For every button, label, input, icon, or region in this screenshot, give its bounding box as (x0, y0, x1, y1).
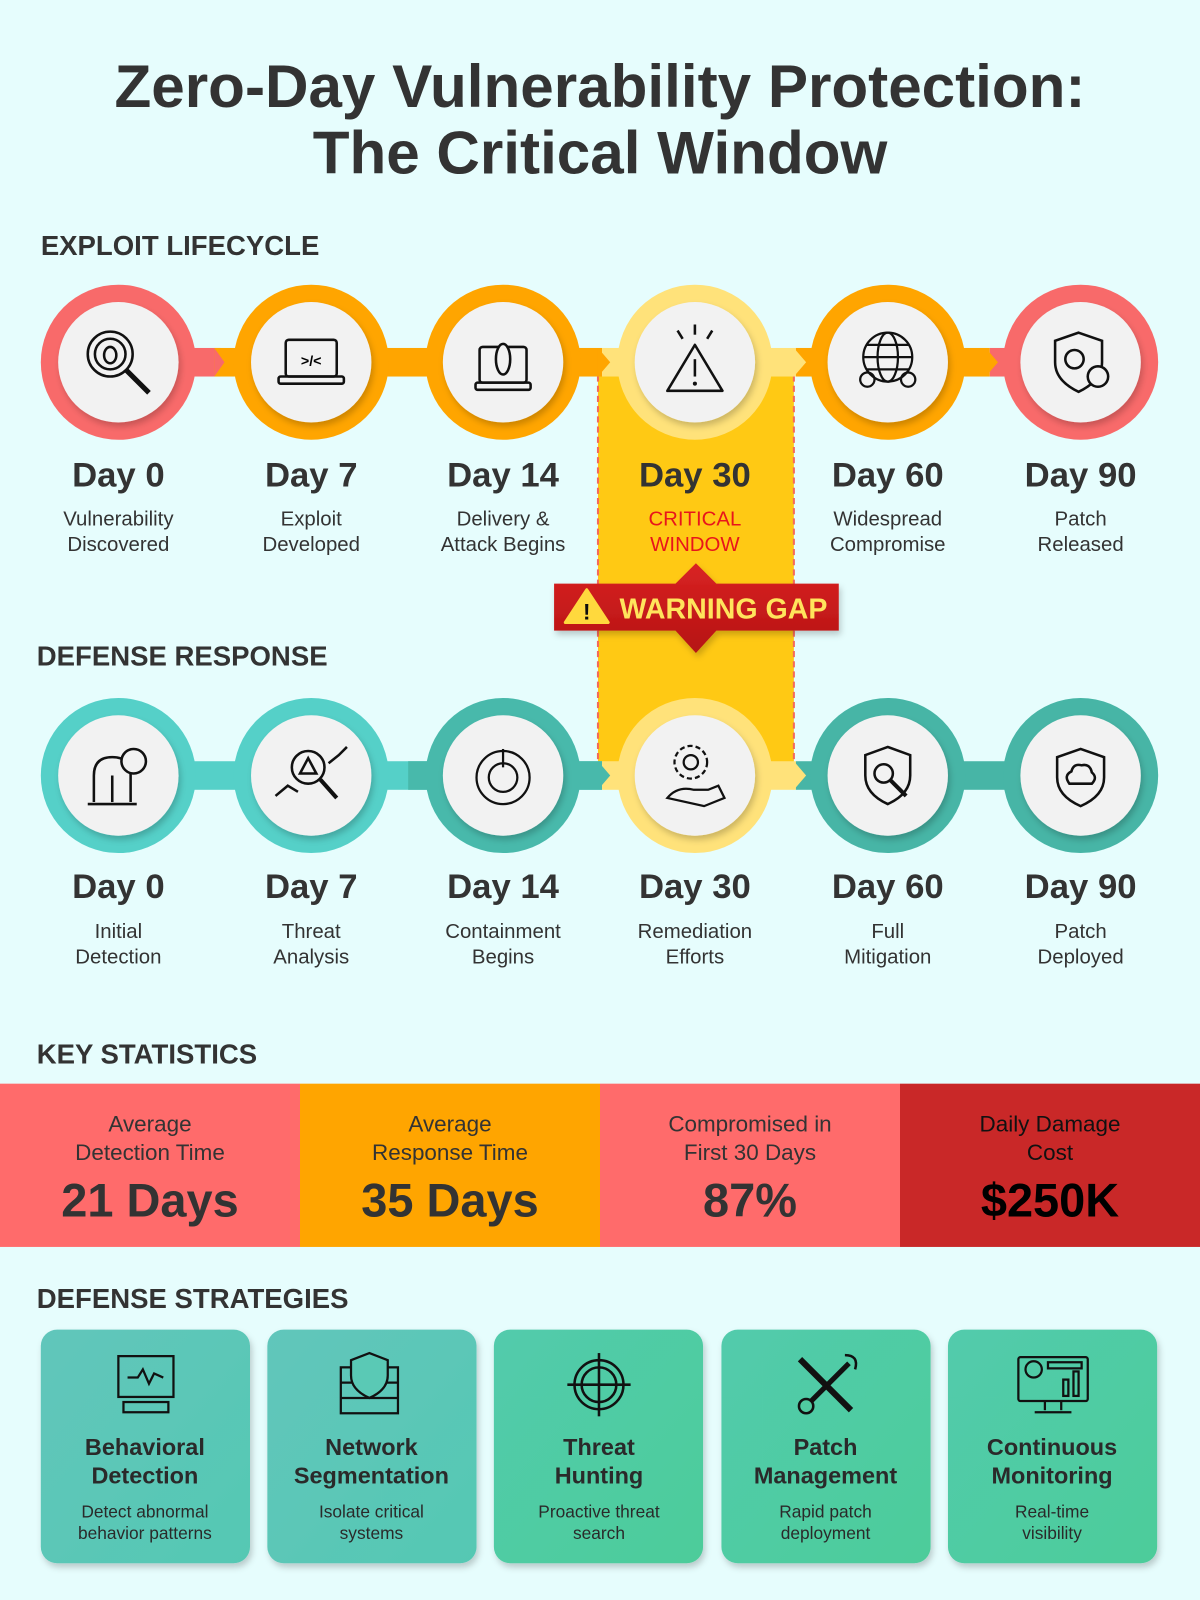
step: day 7 exploit developed: Developed (262, 534, 360, 556)
card: threat hunting (494, 1330, 703, 1563)
stat: compromised in first 30 days: Compromised in (668, 1112, 832, 1137)
stat: average response time: Response Time (372, 1140, 528, 1165)
timeline: defense response (41, 698, 1158, 968)
step: day 7 exploit developed: Exploit (281, 509, 342, 531)
step: day 0 initial detection: Initial (95, 921, 142, 943)
heading: key statistics: KEY STATISTICS (37, 1038, 257, 1069)
step: day 90 patch released: Released (1038, 534, 1124, 556)
step: day 30 critical window: CRITICAL (648, 509, 741, 531)
step: day 30 remediation efforts: Day 30 (639, 868, 751, 906)
step: day 7 threat analysis (234, 698, 389, 968)
card: patch management: deployment (781, 1523, 870, 1543)
card: network segmentation: Segmentation (294, 1463, 449, 1489)
step: day 60 full mitigation (810, 698, 965, 968)
card: threat hunting: Proactive threat (538, 1501, 660, 1521)
heading: defense strategies: DEFENSE STRATEGIES (37, 1283, 348, 1314)
title: The Critical Window (313, 119, 887, 186)
step: day 7 threat analysis: Threat (282, 921, 341, 943)
strategy cards (41, 1330, 1157, 1563)
heading: defense response: DEFENSE RESPONSE (37, 640, 328, 671)
stat: average response time: Average (408, 1112, 492, 1137)
step: day 0 vulnerability discovered: Vulnerability (63, 509, 174, 531)
step: day 30 critical window: WINDOW (650, 534, 740, 556)
step: day 7 threat analysis: Analysis (273, 946, 349, 968)
warning gap banner (554, 563, 839, 653)
stat: daily damage cost: Daily Damage (980, 1112, 1120, 1137)
card: threat hunting: Threat (563, 1434, 635, 1460)
timeline: exploit lifecycle (41, 285, 1158, 556)
step: day 30 critical window: Day 30 (639, 457, 751, 495)
step: day 60 full mitigation: Day 60 (832, 868, 944, 906)
card: patch management: Management (754, 1463, 897, 1489)
stat: average detection time: Detection Time (75, 1140, 225, 1165)
card: network segmentation: Isolate critical (319, 1501, 424, 1521)
step: day 90 patch released: Day 90 (1025, 457, 1137, 495)
stats bar (0, 1084, 1200, 1247)
step: day 30 remediation efforts (617, 698, 772, 968)
step: day 30 remediation efforts: Remediation (638, 921, 752, 943)
stat: compromised in first 30 days: First 30 Days (684, 1140, 816, 1165)
heading: exploit lifecycle: EXPLOIT LIFECYCLE (41, 230, 319, 261)
step: day 0 initial detection: Detection (75, 946, 161, 968)
card: continuous monitoring: Continuous (987, 1434, 1117, 1460)
step: day 60 widespread compromise (810, 285, 965, 556)
step: day 60 full mitigation: Full (871, 921, 904, 943)
step: day 60 widespread compromise: Widespread (833, 509, 942, 531)
step: day 14 delivery: Attack Begins (441, 534, 565, 556)
stat: average detection time: 21 Days (61, 1174, 239, 1226)
step: day 14 containment begins: Day 14 (447, 868, 560, 906)
step: day 0 vulnerability discovered (41, 285, 196, 556)
stat: average response time (300, 1084, 600, 1247)
card: network segmentation: Network (325, 1434, 419, 1460)
card: continuous monitoring: Real-time (1015, 1501, 1089, 1521)
card: continuous monitoring: visibility (1022, 1523, 1082, 1543)
step: day 90 patch deployed: Day 90 (1025, 868, 1137, 906)
step: day 14 delivery (426, 285, 581, 556)
step: day 60 full mitigation: Mitigation (844, 946, 931, 968)
card: threat hunting: Hunting (555, 1463, 643, 1489)
card: threat hunting: search (573, 1523, 625, 1543)
card: behavioral detection: Detection (91, 1463, 198, 1489)
stat: daily damage cost: $250K (981, 1174, 1119, 1226)
critical window highlight band (598, 376, 794, 763)
card: behavioral detection: Behavioral (85, 1434, 205, 1460)
stat: average response time: 35 Days (361, 1174, 539, 1226)
step: day 60 widespread compromise: Day 60 (832, 457, 944, 495)
step: day 90 patch deployed: Deployed (1038, 946, 1124, 968)
step: day 7 exploit developed: Day 7 (265, 457, 358, 495)
step: day 30 critical window (617, 285, 772, 556)
stat: average detection time (0, 1084, 300, 1247)
stat: compromised in first 30 days (600, 1084, 900, 1247)
title: Zero-Day Vulnerability Protection: (115, 53, 1085, 120)
card: continuous monitoring (948, 1330, 1157, 1563)
warning gap banner: ! (583, 599, 590, 624)
card: patch management (721, 1330, 931, 1563)
step: day 14 delivery: Day 14 (447, 457, 560, 495)
step: day 14 containment begins: Containment (445, 921, 561, 943)
card: behavioral detection: Detect abnormal (81, 1501, 208, 1521)
step: day 30 remediation efforts: Efforts (666, 946, 724, 968)
card: continuous monitoring: Monitoring (991, 1463, 1113, 1489)
stat: compromised in first 30 days: 87% (703, 1174, 797, 1226)
step: day 14 containment begins: Begins (472, 946, 534, 968)
title (115, 53, 1085, 186)
step: day 90 patch released (1003, 285, 1158, 556)
card: patch management: Rapid patch (779, 1501, 872, 1521)
card: patch management: Patch (794, 1434, 857, 1460)
card: network segmentation: systems (340, 1523, 404, 1543)
step: day 7 threat analysis: Day 7 (265, 868, 358, 906)
step: day 60 widespread compromise: Compromise (830, 534, 946, 556)
card: behavioral detection (41, 1330, 250, 1563)
step: day 90 patch deployed: Patch (1055, 921, 1107, 943)
step: day 14 containment begins (426, 698, 581, 968)
card: network segmentation (267, 1330, 477, 1563)
stat: daily damage cost: Cost (1027, 1140, 1074, 1165)
step: day 0 initial detection: Day 0 (72, 868, 165, 906)
step: day 0 vulnerability discovered: Discovered (67, 534, 169, 556)
stat: average detection time: Average (108, 1112, 192, 1137)
step: day 90 patch deployed (1003, 698, 1158, 968)
step: day 7 exploit developed (234, 285, 389, 556)
card: behavioral detection: behavior patterns (78, 1523, 212, 1543)
stat: daily damage cost (900, 1084, 1200, 1247)
step: day 0 initial detection (41, 698, 196, 968)
step: day 0 vulnerability discovered: Day 0 (72, 457, 165, 495)
warning gap banner: WARNING GAP (620, 593, 827, 625)
step: day 14 delivery: Delivery & (457, 509, 550, 531)
step: day 90 patch released: Patch (1055, 509, 1107, 531)
step: day 7 exploit developed: >/< (301, 353, 322, 369)
